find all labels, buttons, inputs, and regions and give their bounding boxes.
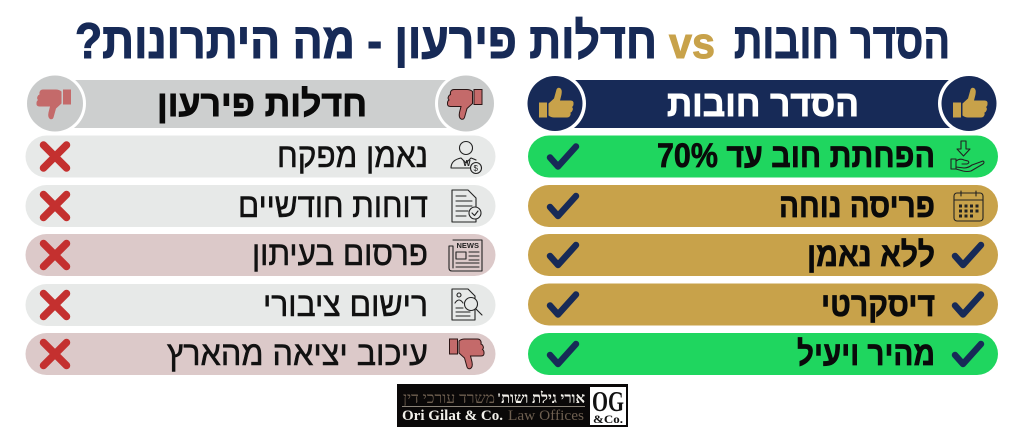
icon: person with coin: $	[474, 164, 478, 173]
row: newspaper publication	[26, 234, 496, 276]
logo Hebrew name: אורי גילת ושות'	[497, 390, 585, 407]
icon: cross	[44, 244, 66, 266]
header: insolvency	[24, 72, 497, 134]
title: חדלות פירעון - מה היתרונות?	[75, 13, 657, 69]
header: debt settlement: הסדר חובות	[667, 83, 859, 124]
row: monthly reports	[26, 185, 496, 227]
icon: check	[550, 344, 576, 364]
panel: debt settlement	[524, 72, 1000, 375]
row: public registry	[26, 284, 496, 326]
title: הסדר חובות	[734, 13, 950, 69]
icon: thumb down	[450, 339, 484, 369]
row: discreet: דיסקרטי	[821, 286, 935, 324]
icon: check	[550, 294, 576, 314]
logo English name: Ori Gilat & Co.	[402, 408, 503, 424]
icon: thumb down right	[435, 72, 497, 134]
title: vs	[669, 19, 715, 68]
row: discreet	[528, 284, 998, 326]
icon: check	[550, 196, 576, 216]
logo English name	[402, 408, 584, 424]
logo Hebrew name: משרד עורכי דין	[403, 391, 495, 407]
row: no trustee	[528, 234, 998, 276]
row: monthly reports: דוחות חודשיים	[238, 187, 428, 225]
icon: calendar	[954, 191, 983, 221]
row: comfortable spread: פריסה נוחה	[779, 187, 935, 225]
icon: person with coin	[451, 142, 482, 174]
row: supervising trustee	[26, 136, 496, 178]
logo English name: Law Offices	[508, 408, 584, 424]
row: comfortable spread	[528, 185, 998, 227]
icon: check right	[955, 294, 981, 314]
row: public registry: רישום ציבורי	[263, 286, 428, 324]
row: newspaper publication: פרסום בעיתון	[252, 235, 428, 273]
row: debt reduction: הפחתת חוב עד 70%	[657, 137, 935, 175]
row: supervising trustee: נאמן מפקח	[277, 137, 428, 175]
row: exit ban	[26, 333, 496, 375]
logo Hebrew name	[403, 390, 585, 407]
icon: cross	[44, 342, 66, 366]
header: debt settlement	[524, 72, 1000, 134]
icon: check right	[955, 344, 981, 364]
icon: thumb up right	[938, 72, 1000, 134]
icon: thumb down left	[24, 72, 86, 134]
row: no trustee: ללא נאמן	[807, 236, 935, 274]
icon: cross	[44, 145, 66, 168]
row: exit ban: עיכוב יציאה מהארץ	[167, 335, 428, 373]
icon: person with coin: W	[463, 159, 471, 168]
row: debt reduction	[528, 136, 998, 178]
panel: insolvency	[24, 72, 497, 375]
logo mark	[590, 387, 626, 426]
icon: document with check	[452, 190, 481, 222]
icon: newspaper: NEWS	[456, 241, 479, 250]
logo: Ori Gilat & Co.	[397, 384, 628, 427]
icon: check	[550, 245, 576, 265]
icon: document with magnifier	[452, 289, 482, 320]
icon: hand with arrow	[951, 141, 984, 172]
icon: check	[550, 146, 576, 166]
icon: thumb up left	[524, 72, 586, 134]
icon: newspaper	[449, 240, 482, 271]
icon: cross	[44, 194, 66, 218]
logo mark: OG	[592, 387, 624, 418]
header: insolvency: חדלות פירעון	[157, 83, 367, 124]
logo mark: &Co.	[593, 412, 623, 426]
icon: check right	[955, 245, 981, 265]
icon: cross	[44, 294, 66, 316]
row: fast and efficient: מהיר ויעיל	[797, 335, 935, 373]
row: fast and efficient	[528, 333, 998, 375]
